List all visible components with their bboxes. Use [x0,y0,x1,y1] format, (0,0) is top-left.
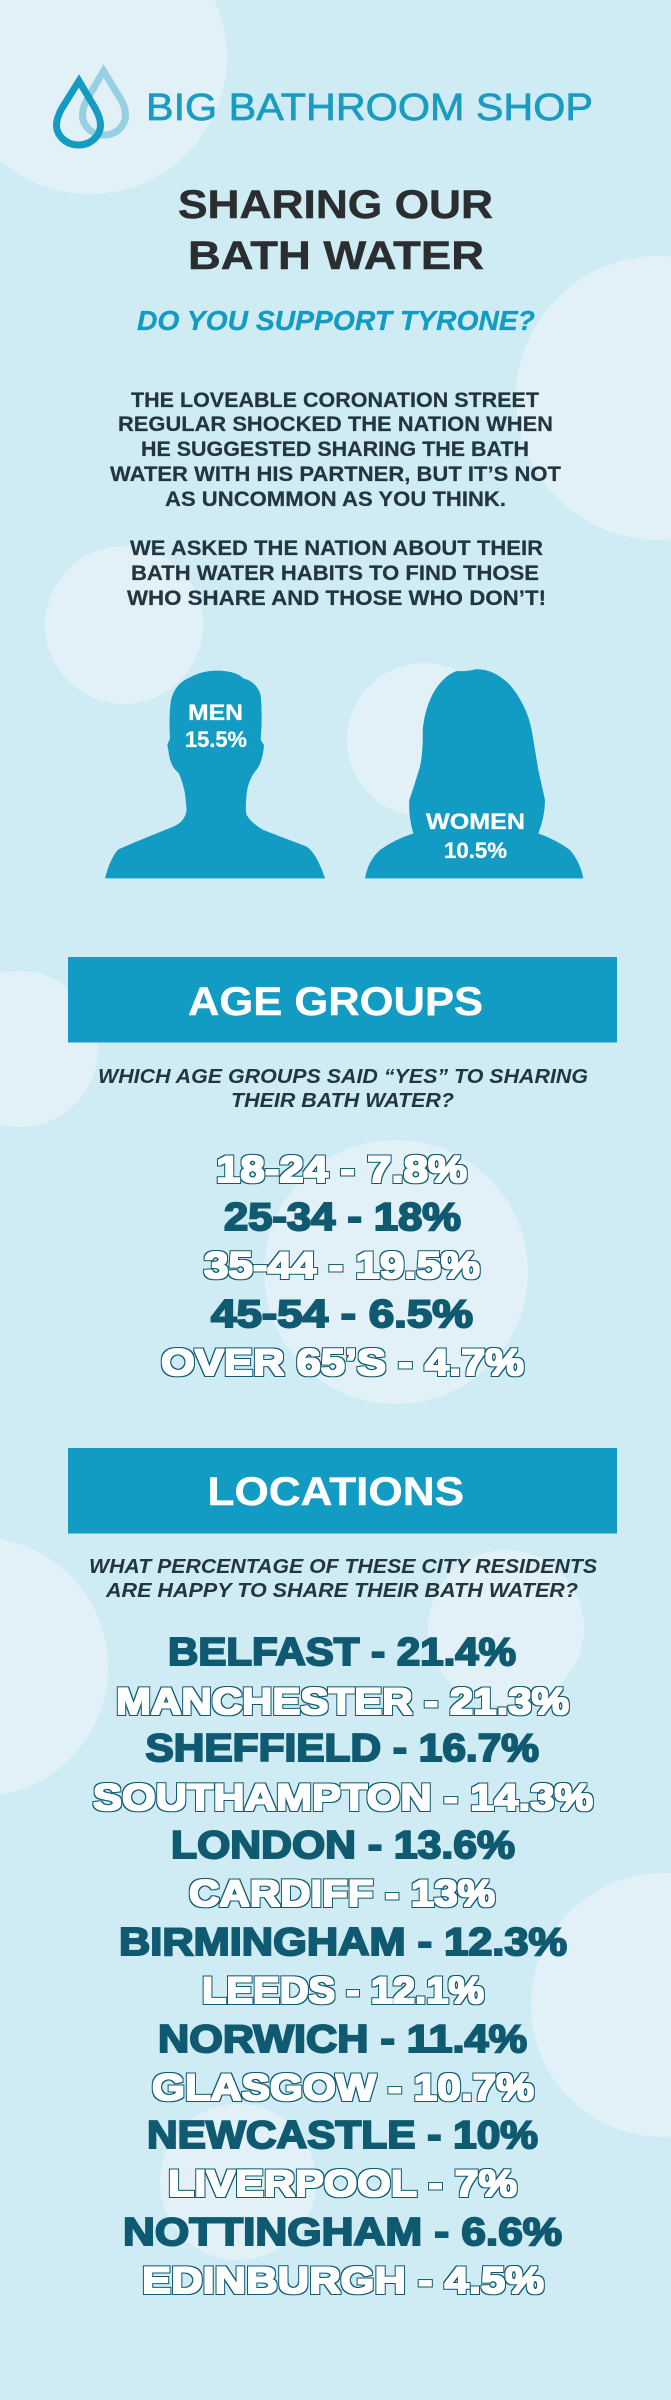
locations question: ARE HAPPY TO SHARE THEIR BATH WATER? [105,1580,578,1602]
locations list: LEEDS - 12.1% [202,1970,484,2011]
men silhouette with stat: MEN [188,700,243,725]
age groups question: WHICH AGE GROUPS SAID “YES” TO SHARING [98,1066,588,1088]
age groups banner [68,957,617,1042]
age groups list: 35-44 - 19.5% [204,1245,480,1286]
locations list: LIVERPOOL - 7% [168,2163,517,2204]
locations list: CARDIFF - 13% [189,1873,495,1914]
locations list: BELFAST - 21.4% [168,1631,516,1674]
locations list: NEWCASTLE - 10% [147,2114,538,2157]
subtitle: DO YOU SUPPORT TYRONE? [137,305,535,336]
locations list: NOTTINGHAM - 6.6% [123,2211,562,2254]
locations list: GLASGOW - 10.7% [152,2067,534,2108]
locations banner [68,1448,617,1534]
title: SHARING OUR [178,183,493,227]
age groups list: 45-54 - 6.5% [211,1293,473,1336]
logo [56,71,593,145]
locations banner: LOCATIONS [208,1470,464,1514]
intro text: AS UNCOMMON AS YOU THINK. [165,487,506,511]
intro text: WATER WITH HIS PARTNER, BUT IT’S NOT [110,462,561,486]
men silhouette with stat [105,671,325,878]
locations list: SHEFFIELD - 16.7% [146,1727,539,1770]
icon: water drops [56,71,126,145]
locations list: LONDON - 13.6% [171,1824,515,1867]
locations list: NORWICH - 11.4% [158,2018,527,2061]
intro text: THE LOVEABLE CORONATION STREET [131,388,539,412]
intro text: WHO SHARE AND THOSE WHO DON’T! [127,586,546,610]
age groups list: 25-34 - 18% [224,1196,461,1239]
locations list [93,1631,593,2301]
age groups list: 18-24 - 7.8% [216,1149,467,1190]
intro text [110,388,561,610]
women silhouette with stat [365,669,583,878]
men silhouette with stat: 15.5% [185,727,247,752]
intro text: REGULAR SHOCKED THE NATION WHEN [118,412,553,436]
title [178,183,493,278]
intro text: BATH WATER HABITS TO FIND THOSE [131,561,539,585]
locations question [89,1556,598,1602]
women silhouette with stat: WOMEN [426,809,525,834]
logo wordmark: BIG BATHROOM SHOP [146,87,593,129]
locations list: MANCHESTER - 21.3% [116,1681,569,1722]
age groups question: THEIR BATH WATER? [231,1090,454,1112]
locations question: WHAT PERCENTAGE OF THESE CITY RESIDENTS [89,1556,598,1578]
intro text: WE ASKED THE NATION ABOUT THEIR [130,536,543,560]
intro text: HE SUGGESTED SHARING THE BATH [141,437,529,461]
panel: locations [68,1448,617,2301]
title: BATH WATER [188,234,484,278]
age groups question [98,1066,588,1112]
panel: age groups [68,957,617,1383]
women silhouette with stat: 10.5% [444,838,507,863]
age groups list [161,1149,524,1383]
age groups list: OVER 65’S - 4.7% [161,1342,524,1383]
locations list: SOUTHAMPTON - 14.3% [93,1777,593,1818]
age groups banner: AGE GROUPS [188,980,483,1024]
locations list: EDINBURGH - 4.5% [142,2260,544,2301]
locations list: BIRMINGHAM - 12.3% [119,1921,567,1964]
